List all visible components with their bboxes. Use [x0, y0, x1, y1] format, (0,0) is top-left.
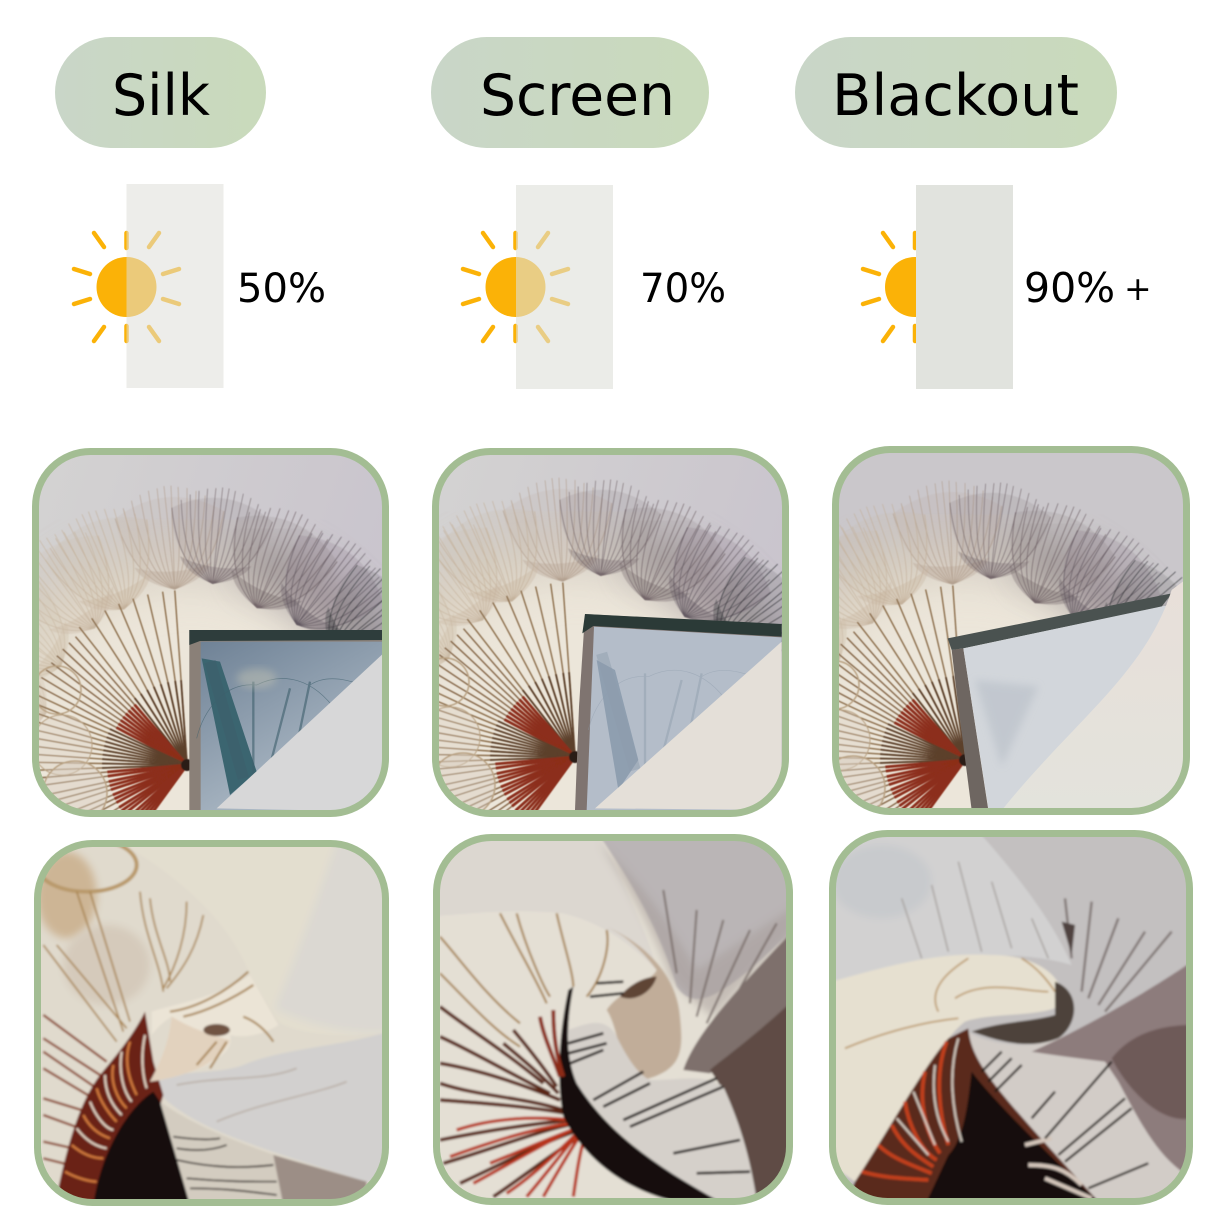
photo: silk fabric twisted drape: [30, 835, 397, 1212]
photo: blackout fabric corner fold: [832, 446, 1190, 815]
label: 90% +: +: [1124, 269, 1152, 308]
pill: Blackout heading: [795, 37, 1117, 148]
photo: screen fabric corner fold: [432, 448, 789, 817]
pill: Blackout heading: Blackout: [832, 63, 1079, 129]
icon: sun behind blackout fabric, 90% plus: [863, 185, 1013, 389]
photo: blackout fabric twisted drape: [825, 825, 1202, 1212]
label: 70%: 70%: [640, 266, 726, 312]
label: 90% +: 90%: [1024, 264, 1115, 312]
photo: silk fabric corner fold: [32, 448, 389, 817]
pill: Silk heading: [55, 37, 266, 148]
photo: screen fabric twisted drape: [430, 830, 797, 1210]
pill: Screen heading: [431, 37, 709, 148]
pill: Screen heading: Screen: [480, 63, 675, 129]
icon: sun behind screen fabric, 70%: [463, 185, 613, 389]
pill: Silk heading: Silk: [112, 63, 210, 129]
icon: sun behind silk fabric, 50%: [74, 184, 224, 388]
label: 50%: 50%: [237, 266, 326, 312]
